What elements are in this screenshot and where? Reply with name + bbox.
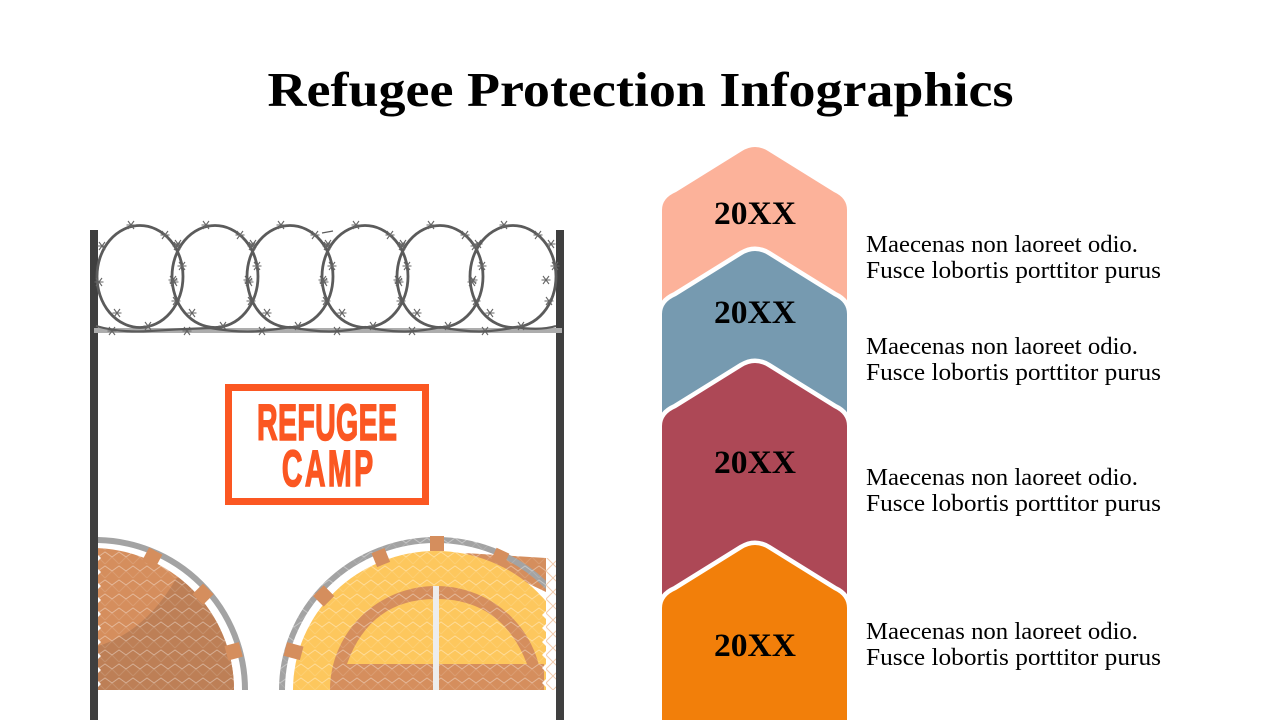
arrow 3: [662, 363, 847, 620]
description 1: [866, 232, 1161, 284]
right tent: [279, 536, 556, 690]
left tent: [98, 537, 248, 690]
arrow 2: [662, 251, 847, 440]
left fence post: [90, 230, 98, 720]
arrow 3: 20XX: [714, 445, 796, 481]
arrow 4: [662, 545, 847, 720]
arrow 4: 20XX: [714, 628, 796, 664]
illustration: refugee camp behind fence: [90, 220, 564, 720]
description 4: Maecenas non laoreet odio.: [866, 619, 1138, 645]
sign: refugee camp: CAMP: [282, 440, 373, 497]
description 3: Fusce lobortis porttitor purus: [866, 491, 1161, 517]
timeline arrow stack: [662, 147, 847, 720]
description 3: [866, 465, 1161, 517]
description 1: Maecenas non laoreet odio.: [866, 232, 1138, 258]
sign: refugee camp: [228, 388, 426, 502]
arrow 1: [662, 147, 847, 330]
description 2: [866, 334, 1161, 386]
right fence post: [556, 230, 564, 720]
description 3: Maecenas non laoreet odio.: [866, 465, 1138, 491]
title: Refugee Protection Infographics: [268, 62, 1014, 117]
sign: refugee camp: REFUGEE: [257, 394, 397, 451]
description 2: Fusce lobortis porttitor purus: [866, 360, 1161, 386]
description 1: Fusce lobortis porttitor purus: [866, 258, 1161, 284]
description 4: [866, 619, 1161, 671]
arrow 2: 20XX: [714, 295, 796, 331]
arrow 1: 20XX: [714, 196, 796, 232]
description 2: Maecenas non laoreet odio.: [866, 334, 1138, 360]
barbed wire coil: [94, 221, 562, 335]
description 4: Fusce lobortis porttitor purus: [866, 645, 1161, 671]
